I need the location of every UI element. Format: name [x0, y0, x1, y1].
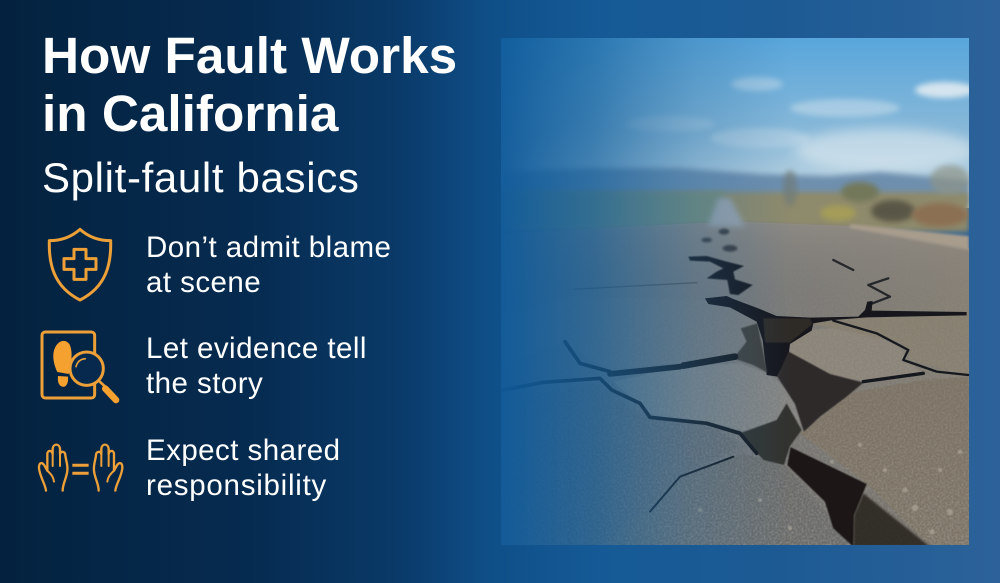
text: expect shared: responsibility	[146, 469, 327, 502]
main chasm	[705, 296, 967, 377]
icon: shield with cross	[49, 229, 111, 300]
title: in California	[42, 85, 338, 142]
text: let evidence: Let evidence tell	[146, 332, 367, 365]
icon: footprint under magnifier	[42, 332, 116, 400]
vanishing road	[708, 198, 745, 226]
asphalt slabs	[618, 282, 969, 540]
road shoulder	[850, 224, 969, 250]
cracks	[500, 229, 968, 547]
text: expect shared: Expect shared	[146, 434, 340, 467]
left fade into background	[501, 38, 771, 545]
clouds	[625, 77, 975, 172]
title: How Fault Works	[42, 27, 457, 84]
photo: cracked road under sky	[501, 38, 969, 545]
branch crack left	[565, 342, 610, 372]
sky	[501, 38, 969, 208]
text: don't admit blame: at scene	[146, 266, 261, 299]
text: don't admit blame: Don’t admit blame	[146, 231, 391, 264]
distant crack fragments	[701, 229, 737, 252]
lower chasm	[787, 447, 867, 547]
roadside vegetation	[490, 165, 970, 232]
title	[42, 27, 457, 142]
text: don't admit blame	[146, 231, 391, 299]
asphalt grain	[574, 326, 969, 545]
icon: two equal hands	[39, 445, 122, 491]
branch cracks right	[833, 321, 968, 375]
text: let evidence	[146, 332, 367, 400]
pale aggregate speckles	[698, 443, 962, 535]
text: let evidence: the story	[146, 367, 263, 400]
text: expect shared	[146, 434, 340, 502]
road surface	[522, 224, 969, 545]
subtitle: Split-fault basics	[42, 154, 360, 201]
horizon hills	[501, 168, 969, 206]
